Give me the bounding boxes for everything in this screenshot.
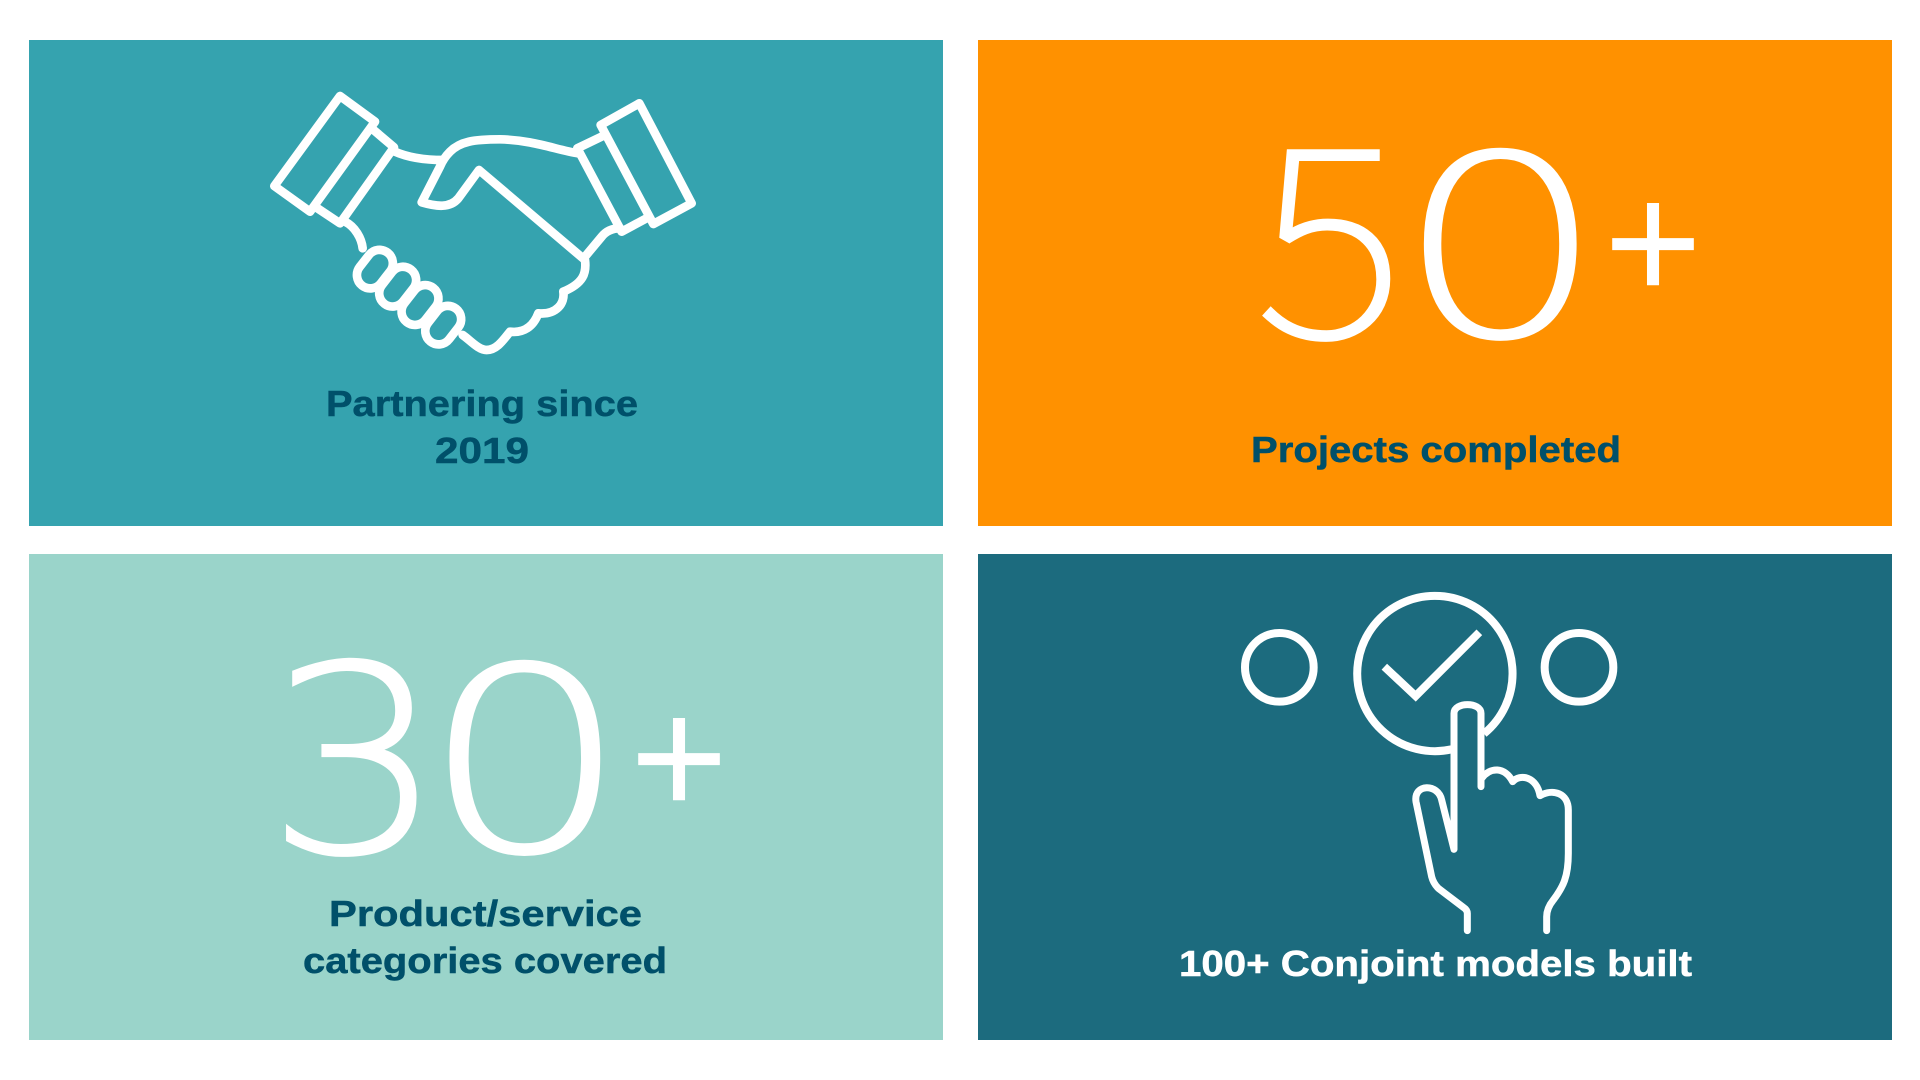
label: categories covered: categories covered (303, 940, 667, 981)
panel: partnering since 2019 (29, 40, 943, 526)
icon: hand selecting checkmark (1245, 596, 1613, 931)
label: projects completed: Projects completed (1251, 429, 1621, 470)
panel: conjoint models (978, 554, 1892, 1040)
icon: handshake (274, 96, 692, 350)
big number: 50+: 5 (1256, 30, 1404, 413)
big number: 30+ (266, 611, 728, 913)
big number: 30+: + (630, 663, 728, 851)
panel: projects completed (978, 30, 1892, 526)
big number: 50+ (1256, 30, 1702, 413)
big number: 30+: 0 (422, 614, 629, 912)
label: 2019: 2019 (435, 430, 529, 471)
panel: product and service categories (29, 554, 943, 1040)
big number: 30+: 3 (266, 611, 445, 913)
big number: 50+: + (1604, 148, 1702, 336)
label: product/service: Product/service (329, 893, 642, 934)
big number: 50+: 0 (1406, 34, 1595, 411)
label: 100+ conjoint models built: 100+ Conjoint models built (1179, 943, 1692, 984)
label: partnering since: Partnering since (326, 383, 638, 424)
